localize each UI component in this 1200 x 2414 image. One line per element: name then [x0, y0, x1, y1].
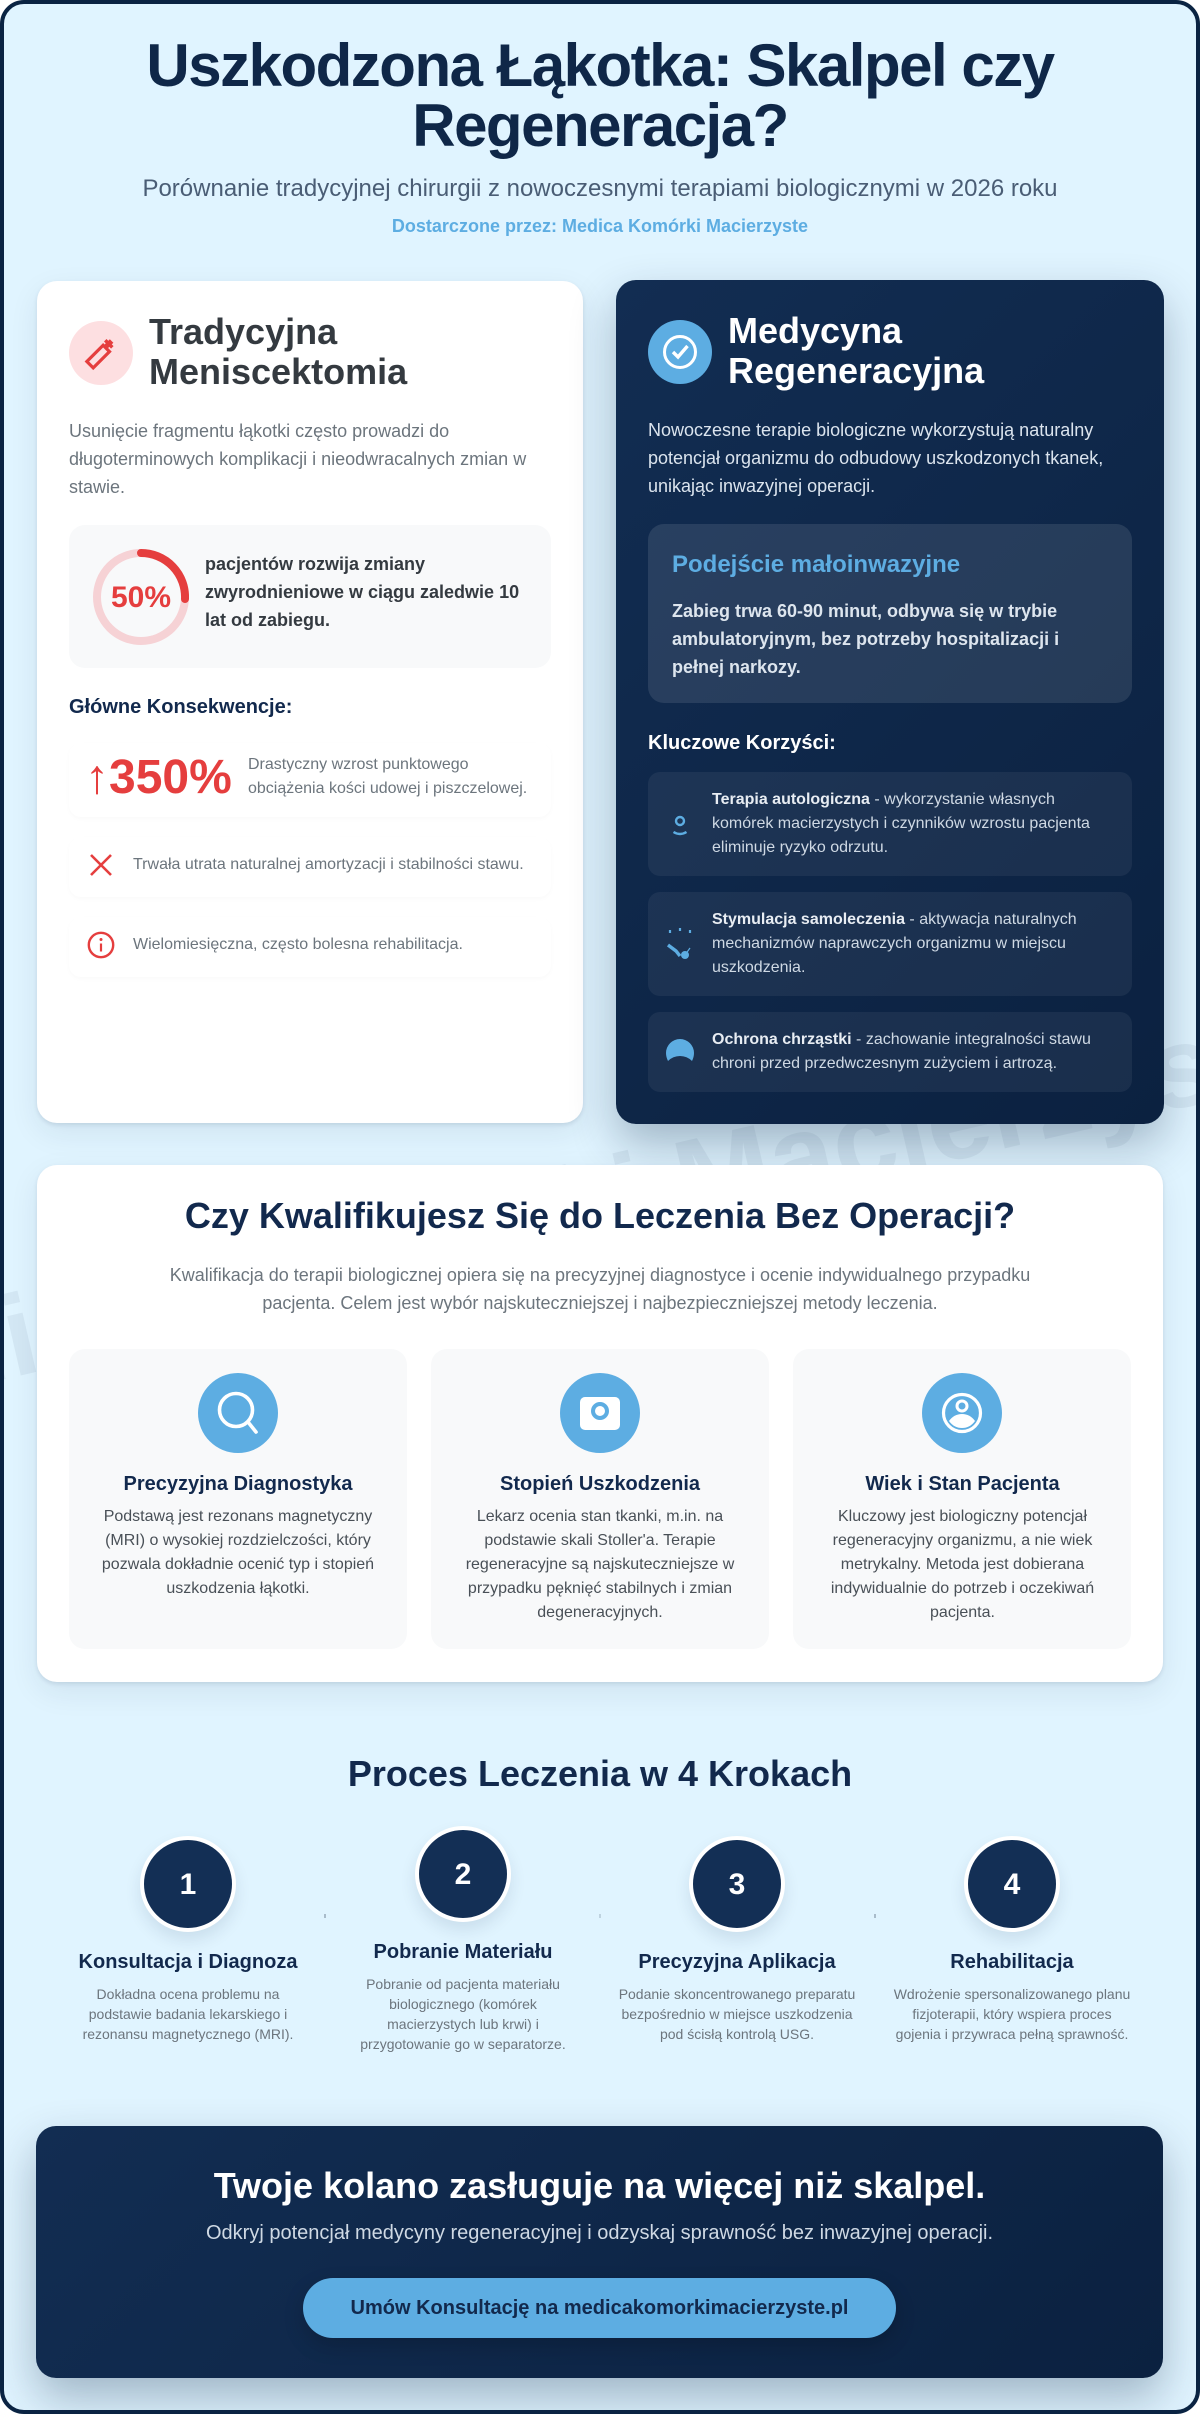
minimally invasive heading: Podejście małoinwazyjne	[672, 551, 960, 578]
step 1 text: Dokładna ocena problemu na	[97, 1986, 279, 2002]
damage grade text: przypadku pęknięć stabilnych i zmian	[468, 1580, 732, 1597]
damage grade text: podstawie skali Stoller'a. Terapie	[484, 1532, 716, 1549]
panel: call to action	[36, 2126, 1163, 2378]
step 2 number: 2	[455, 1858, 471, 1891]
panel: traditional meniscectomy	[37, 281, 583, 1123]
step 3 number	[689, 1836, 785, 1932]
text: regenerative intro: potencjał organizmu do odbudowy uszkodzonych tkanek,	[648, 448, 1103, 468]
age and condition text: pacjenta.	[930, 1604, 995, 1621]
icon: info	[88, 932, 114, 958]
text: traditional intro: stawie.	[69, 477, 125, 497]
step 2 text	[360, 1976, 566, 2052]
heading: process: Proces Leczenia w 4 Krokach	[348, 1753, 852, 1794]
stat text: lat od zabiegu.	[205, 610, 330, 630]
step 3 text: pod ścisłą kontrolą USG.	[660, 2026, 814, 2042]
step 3 title: Precyzyjna Aplikacja	[638, 1951, 836, 1973]
stat value: 50%	[111, 581, 171, 614]
stat text: zwyrodnieniowe w ciągu zaledwie 10	[205, 582, 519, 602]
heading: key benefits: Kluczowe Korzyści:	[648, 732, 836, 754]
benefit 3 text: Ochrona chrząstki - zachowanie integralności stawu	[712, 1031, 1091, 1048]
minimally invasive text: pełnej narkozy.	[672, 657, 801, 677]
step 1 text: podstawie badania lekarskiego i	[89, 2006, 287, 2022]
icon: cartilage	[666, 1039, 694, 1061]
text: traditional intro: Usunięcie fragmentu łąkotki często prowadzi do	[69, 421, 449, 441]
step 2 text: macierzystych lub krwi) i	[387, 2016, 539, 2032]
provider line: Dostarczone przez: Medica Komórki Macierzyste	[392, 216, 808, 236]
title: Uszkodzona Łąkotka: Skalpel czy	[146, 32, 1054, 99]
consequence 2	[69, 837, 551, 897]
icon: cross	[90, 854, 112, 876]
panel: minimally invasive	[648, 524, 1132, 703]
title: Regeneracja?	[412, 92, 788, 159]
step 4 text: gojenia i przywraca pełną sprawność.	[896, 2026, 1128, 2042]
stat text: pacjentów rozwija zmiany	[205, 554, 425, 574]
benefit 1 text	[712, 791, 1090, 856]
step 1 number: 1	[180, 1868, 196, 1901]
step 3 text: Podanie skoncentrowanego preparatu	[619, 1986, 855, 2002]
350 percent value: ↑350%	[85, 751, 232, 804]
benefit 2 text: uszkodzenia.	[712, 959, 805, 976]
benefit 3 text	[712, 1031, 1091, 1072]
panel: 50 percent stat	[69, 525, 551, 668]
benefit 2 text: Stymulacja samoleczenia - aktywacja naturalnych	[712, 911, 1077, 928]
text: qualification intro: Kwalifikacja do terapii biologicznej opiera się na precyzyjnej diagnostyce i ocenie indywidualnego przypadku	[170, 1265, 1030, 1285]
consequence 1 text	[248, 756, 527, 797]
step 2 text: Pobranie od pacjenta materiału	[366, 1976, 560, 1992]
heading: regenerative: Regeneracyjna	[728, 350, 984, 391]
call to action button: Umów Konsultację na medicakomorkimacierzyste.pl	[351, 2296, 848, 2318]
connector tick 1	[324, 1914, 326, 1918]
diagnostics text	[102, 1508, 374, 1597]
age and condition text: metrykalny. Metoda jest dobierana	[841, 1556, 1084, 1573]
step 4 text	[894, 1986, 1130, 2042]
benefit 1 text: komórek macierzystych i czynników wzrostu pacjenta	[712, 815, 1090, 832]
benefit 1 text: Terapia autologiczna - wykorzystanie własnych	[712, 791, 1055, 808]
text: qualification intro: pacjenta. Celem jest wybór najskuteczniejszej i najbezpieczniejszej metody leczenia.	[262, 1293, 938, 1313]
text: qualification intro	[170, 1265, 1030, 1313]
step 3 number: 3	[729, 1868, 745, 1901]
icon: scalpel	[69, 321, 133, 385]
text: regenerative intro: unikając inwazyjnej operacji.	[648, 476, 875, 496]
benefit 3	[648, 1012, 1132, 1092]
heading: regenerative	[728, 310, 984, 391]
card: diagnostics	[69, 1349, 407, 1649]
step 3 text: bezpośrednio w miejsce uszkodzenia	[621, 2006, 853, 2022]
card: age and condition	[793, 1349, 1131, 1649]
call to action text: Odkryj potencjał medycyny regeneracyjnej i odzyskaj sprawność bez inwazyjnej operacji.	[206, 2222, 993, 2244]
title	[146, 32, 1055, 159]
icon: magnifier	[198, 1373, 278, 1453]
heading: consequences: Główne Konsekwencje:	[69, 696, 292, 718]
damage grade text: degeneracyjnych.	[537, 1604, 663, 1621]
text: traditional intro	[69, 421, 526, 497]
card: damage grade	[431, 1349, 769, 1649]
consequence 3 text: Wielomiesięczna, często bolesna rehabilitacja.	[133, 936, 463, 953]
benefit 3 text: chroni przed przedwczesnym zużyciem i artrozą.	[712, 1055, 1057, 1072]
step 2 text: biologicznego (komórek	[389, 1996, 537, 2012]
call to action button	[303, 2278, 896, 2338]
diagnostics heading: Precyzyjna Diagnostyka	[124, 1473, 352, 1495]
step 1 title: Konsultacja i Diagnoza	[79, 1951, 297, 1973]
age and condition heading: Wiek i Stan Pacjenta	[865, 1473, 1060, 1495]
chart: 50 percent donut	[93, 549, 189, 645]
connector tick 2	[599, 1914, 601, 1918]
panel: regenerative medicine	[616, 280, 1164, 1124]
step 4 number: 4	[1004, 1868, 1020, 1901]
icon: person	[922, 1373, 1002, 1453]
subtitle: Porównanie tradycyjnej chirurgii z nowoczesnymi terapiami biologicznymi w 2026 roku	[142, 175, 1058, 202]
minimally invasive text: Zabieg trwa 60-90 minut, odbywa się w trybie	[672, 601, 1057, 621]
diagnostics text: (MRI) o wysokiej rozdzielczości, który	[105, 1532, 371, 1549]
step 4 text: fizjoterapii, który wspiera proces	[912, 2006, 1112, 2022]
damage grade text	[466, 1508, 734, 1621]
damage grade text: Lekarz ocenia stan tkanki, m.in. na	[477, 1508, 723, 1525]
consequence 2 text: Trwała utrata naturalnej amortyzacji i stabilności stawu.	[133, 856, 524, 873]
icon: scan	[560, 1373, 640, 1453]
consequence 1 text: Drastyczny wzrost punktowego	[248, 756, 469, 773]
damage grade heading: Stopień Uszkodzenia	[500, 1473, 700, 1495]
diagnostics text: uszkodzenia łąkotki.	[166, 1580, 310, 1597]
minimally invasive text: ambulatoryjnym, bez potrzeby hospitalizacji i	[672, 629, 1059, 649]
damage grade text: regeneracyjne są najskuteczniejsze w	[466, 1556, 734, 1573]
benefit 1 text: eliminuje ryzyko odrzutu.	[712, 839, 888, 856]
connector tick 3	[874, 1914, 876, 1918]
step 1 text: rezonansu magnetycznego (MRI).	[83, 2026, 293, 2042]
panel: qualification	[37, 1165, 1163, 1682]
age and condition text: indywidualnie do potrzeb i oczekiwań	[831, 1580, 1094, 1597]
consequence 1 text: obciążenia kości udowej i piszczelowej.	[248, 780, 527, 797]
icon: check	[648, 320, 712, 384]
text: regenerative intro: Nowoczesne terapie biologiczne wykorzystują naturalny	[648, 420, 1093, 440]
step 2 number	[415, 1826, 511, 1922]
step 2 title: Pobranie Materiału	[374, 1941, 552, 1963]
minimally invasive text	[672, 601, 1059, 677]
step 1 number	[140, 1836, 236, 1932]
benefit 2 text	[712, 911, 1077, 976]
step 2 text: przygotowanie go w separatorze.	[360, 2036, 566, 2052]
consequence 1	[69, 743, 551, 817]
icon: cell	[673, 816, 687, 836]
age and condition text: regeneracyjny organizmu, a nie wiek	[833, 1532, 1092, 1549]
stat text	[205, 554, 519, 630]
text: traditional intro: długoterminowych komplikacji i nieodwracalnych zmian w	[69, 449, 526, 469]
step 4 number	[964, 1836, 1060, 1932]
heading: regenerative: Medycyna	[728, 310, 902, 351]
benefit 1	[648, 772, 1132, 876]
call to action heading: Twoje kolano zasługuje na więcej niż skalpel.	[214, 2165, 985, 2206]
heading: traditional: Meniscektomia	[149, 351, 407, 392]
benefit 2 text: mechanizmów naprawczych organizmu w miejscu	[712, 935, 1066, 952]
heading: traditional: Tradycyjna	[149, 311, 337, 352]
step 1 text	[83, 1986, 293, 2042]
step 4 title: Rehabilitacja	[950, 1951, 1074, 1973]
diagnostics text: Podstawą jest rezonans magnetyczny	[104, 1508, 372, 1525]
heading: traditional	[149, 311, 408, 392]
heading: qualification: Czy Kwalifikujesz Się do Leczenia Bez Operacji?	[185, 1195, 1015, 1236]
step 3 text	[619, 1986, 855, 2042]
consequence 3	[69, 917, 551, 977]
age and condition text	[831, 1508, 1094, 1621]
icon: healing	[667, 928, 692, 959]
text: regenerative intro	[648, 420, 1103, 496]
age and condition text: Kluczowy jest biologiczny potencjał	[838, 1508, 1087, 1525]
diagnostics text: pozwala dokładnie ocenić typ i stopień	[102, 1556, 374, 1573]
step 4 text: Wdrożenie spersonalizowanego planu	[894, 1986, 1130, 2002]
benefit 2	[648, 892, 1132, 996]
